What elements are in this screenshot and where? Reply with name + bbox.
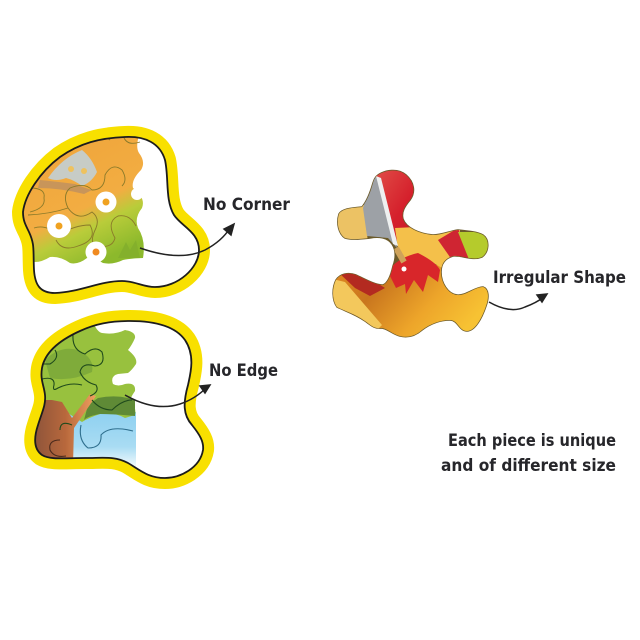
picture: tree puzzle pieces bbox=[36, 326, 136, 466]
sky bbox=[70, 412, 136, 470]
yellow border: no edge bbox=[35, 321, 203, 478]
stem bbox=[396, 248, 404, 262]
piece artwork bbox=[333, 170, 488, 337]
red band bbox=[438, 230, 469, 258]
jigsaw lines bbox=[42, 335, 133, 456]
label: Irregular Shape: Irregular Shape bbox=[493, 268, 626, 287]
outline bbox=[35, 321, 203, 478]
metal ferrule bbox=[363, 176, 397, 248]
dark red corner bbox=[342, 274, 385, 296]
yellow border: no corner bbox=[23, 137, 199, 293]
foliage shade bbox=[45, 349, 92, 379]
yellow band bbox=[395, 225, 460, 268]
outline bbox=[23, 137, 199, 293]
piece shadow bbox=[333, 170, 488, 337]
panel: no corner puzzle bbox=[10, 125, 199, 293]
red flower bbox=[388, 253, 440, 294]
flowers bbox=[47, 166, 116, 262]
orange body bbox=[330, 265, 495, 340]
arrow: irregular shape bbox=[489, 294, 547, 310]
arrow: no edge bbox=[125, 385, 210, 407]
arrow: no corner bbox=[140, 224, 234, 256]
caption: first line: Each piece is unique bbox=[448, 431, 616, 450]
pale lower-left corner bbox=[333, 280, 382, 328]
label: No Corner: No Corner bbox=[203, 195, 291, 214]
bristles bbox=[338, 205, 368, 240]
canopy bbox=[42, 326, 136, 422]
picture: meadow puzzle pieces bbox=[24, 138, 144, 264]
green tip bbox=[458, 232, 488, 258]
jigsaw lines bbox=[28, 138, 140, 248]
label: No Edge: No Edge bbox=[209, 361, 278, 380]
trunk bbox=[36, 394, 96, 458]
rocks bbox=[48, 150, 97, 186]
red top bbox=[376, 170, 414, 240]
grass tuft bbox=[118, 240, 140, 258]
white edge nick bbox=[131, 188, 143, 200]
white spot bbox=[402, 266, 406, 272]
panel: irregular puzzle piece bbox=[328, 165, 495, 340]
panel: no edge puzzle bbox=[25, 315, 203, 478]
caption: second line: and of different size bbox=[441, 456, 616, 475]
